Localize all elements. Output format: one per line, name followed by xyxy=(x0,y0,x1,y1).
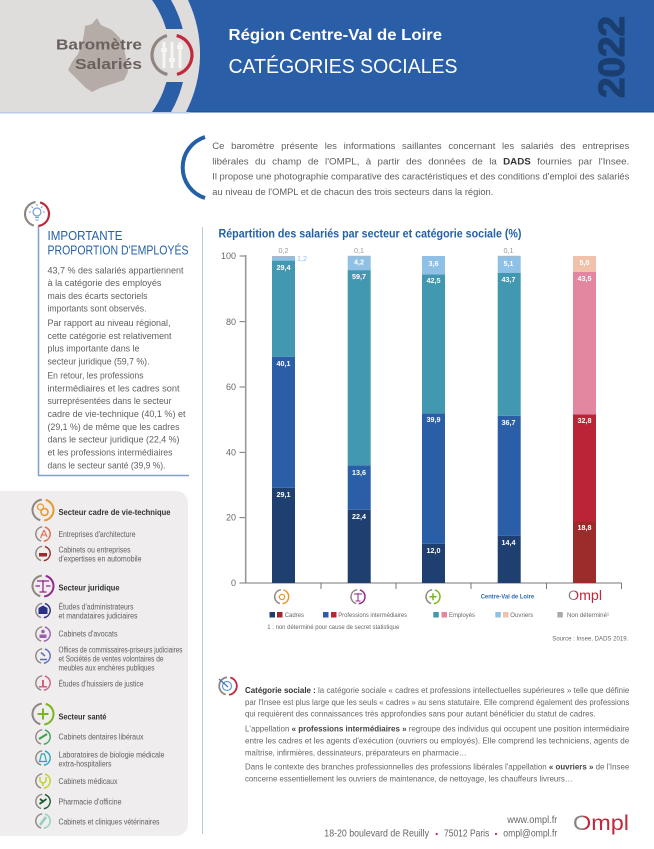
footer contact: ompl@ompl.fr xyxy=(503,828,558,839)
key finding body text: dans le secteur santé (39,9 %). xyxy=(48,459,166,470)
key finding body text xyxy=(48,264,186,470)
panel: sectors list xyxy=(0,491,188,836)
bar: cadre de vie-technique xyxy=(272,246,307,583)
bar: Centre-Val de Loire xyxy=(498,246,521,583)
key finding body text: mais des écarts sectoriels xyxy=(48,290,148,301)
bar: Centre-Val de Loire: 43,7 xyxy=(502,275,516,284)
sector: cadre de vie-technique: Cabinets ou entreprises xyxy=(58,546,130,555)
icon: laboratoire xyxy=(34,749,52,767)
sector: santé xyxy=(30,701,165,830)
key finding body text: intermédiaires et les cadres sont xyxy=(48,383,180,394)
icon: commissaires-priseurs xyxy=(34,647,52,665)
icon: cadre de vie-technique xyxy=(30,497,56,523)
y axis: 60 xyxy=(226,382,236,392)
definition: ouvriers xyxy=(245,762,629,783)
definitions block xyxy=(217,675,629,783)
definition: cadres: Catégorie sociale : la catégorie sociale « cadres et professions intellectuelles supérieures » telle que définie xyxy=(245,685,629,695)
chart legend xyxy=(270,612,610,619)
x category: Centre-Val de Loire: Centre-Val de Loire xyxy=(481,594,535,601)
bar: cadre de vie-technique: 1,2 xyxy=(297,254,307,263)
logo text: Baromètre Salariés: Baromètre xyxy=(56,38,142,54)
intro text xyxy=(212,140,630,197)
sector: juridique: et mandataires judiciaires xyxy=(58,611,138,620)
bar: juridique: 13,6 xyxy=(352,468,366,477)
intro text: Il propose une photographie comparative des caractéristiques et des conditions d'emploi des salariés xyxy=(212,170,630,181)
bar: santé: 39,9 xyxy=(426,415,440,424)
definition: professions intermédiaires: maîtrise, infirmières, dessinateurs, préparateurs en pharmacie… xyxy=(245,748,467,758)
bar: cadre de vie-technique: 40,1 xyxy=(276,359,290,368)
sector: juridique: Cabinets d'avocats xyxy=(58,630,118,639)
key finding body text: cadre de vie-technique (40,1 %) et xyxy=(48,408,186,419)
icon: pharmacie xyxy=(34,793,52,810)
bar: cadre de vie-technique: 0,2 xyxy=(278,246,288,255)
bar: juridique: 4,2 xyxy=(354,258,364,266)
sector: juridique: Secteur juridique xyxy=(58,584,120,593)
bar: santé xyxy=(422,256,445,583)
icon: balance xyxy=(30,573,56,599)
intro text: Ce baromètre présente les informations saillantes concernant les salariés des entreprises xyxy=(212,140,630,151)
chart title: Répartition des salariés par secteur et catégorie sociale (%) xyxy=(218,226,522,240)
footer contact: www.ompl.fr xyxy=(506,815,558,826)
key finding body text: 43,7 % des salariés appartiennent xyxy=(48,264,184,275)
definition: professions intermédiaires: L'appellation « professions intermédiaires » regroupe des individus qui occupent une position intermédiaire xyxy=(245,724,629,734)
header banner xyxy=(0,0,654,114)
chart legend: Employés xyxy=(449,612,476,619)
key finding body text: plus importante dans le xyxy=(48,343,140,354)
x category: santé icon xyxy=(424,588,442,605)
definition: professions intermédiaires xyxy=(245,724,629,758)
panel: key finding xyxy=(22,199,189,476)
icon: target xyxy=(217,675,239,697)
sector: santé: Laboratoires de biologie médicale xyxy=(58,750,165,759)
sector: juridique xyxy=(30,573,182,692)
x category: cadre de vie-technique icon xyxy=(273,588,290,605)
icon: plus xyxy=(30,701,56,727)
bar: juridique xyxy=(348,246,371,583)
sector: santé: Secteur santé xyxy=(58,712,107,721)
bar: Centre-Val de Loire: 5,1 xyxy=(504,259,514,268)
sector: santé: Pharmacie d'officine xyxy=(58,798,122,807)
bar: Centre-Val de Loire: 36,7 xyxy=(502,418,516,427)
sector: juridique: Études d'huissiers de justice xyxy=(58,680,144,689)
icon: huissiers xyxy=(34,674,52,692)
sector: juridique: meubles aux enchères publiques xyxy=(58,664,154,673)
bar: juridique: 59,7 xyxy=(352,272,366,281)
bracket arc xyxy=(183,137,205,198)
definition: cadres: qui requièrent des connaissances très approfondies sans pour autant bénéficier du statut de cadres. xyxy=(245,709,596,719)
bar: Centre-Val de Loire: 0,1 xyxy=(504,246,514,255)
icon: architecture xyxy=(34,525,52,543)
bar: juridique: 22,4 xyxy=(352,512,366,521)
key finding body text: Par rapport au niveau régional, xyxy=(48,317,170,328)
bar: santé: 42,5 xyxy=(426,276,440,285)
icon: médicaux xyxy=(34,772,52,790)
key finding body text: surreprésentées dans le secteur xyxy=(48,395,172,406)
chart legend: Cadres xyxy=(285,612,305,619)
heading: key finding: PROPORTION D'EMPLOYÉS xyxy=(48,242,189,258)
icon: light bulb xyxy=(22,199,52,229)
intro paragraph with bracket xyxy=(183,137,630,198)
stacked bar chart xyxy=(221,246,622,605)
bar: cadre de vie-technique: 29,1 xyxy=(276,490,290,499)
bar: santé: 12,0 xyxy=(426,546,440,555)
intro text: libérales du champ de l'OMPL, à partir des données de la DADS fournies par l'Insee. xyxy=(212,155,629,166)
sector: santé: Cabinets médicaux xyxy=(58,777,118,786)
footer contact: 75012 Paris xyxy=(444,828,489,839)
icon: automobile xyxy=(34,545,52,562)
bar: OMPL: 32,8 xyxy=(578,416,592,425)
y axis: 40 xyxy=(226,448,236,458)
header subtitle: Région Centre-Val de Loire xyxy=(228,27,442,44)
bar: juridique: 0,1 xyxy=(354,246,364,255)
y axis: 80 xyxy=(226,317,236,327)
heading: key finding: IMPORTANTE xyxy=(48,228,123,243)
x axis xyxy=(240,583,622,589)
sector: juridique: Études d'administrateurs xyxy=(58,602,134,611)
icon: avocats xyxy=(34,625,52,643)
definition: cadres xyxy=(245,685,629,719)
icon: administrateurs xyxy=(34,602,52,619)
chart legend: Professions intermédiaires xyxy=(338,612,408,619)
definition: ouvriers: concerne essentiellement les ouvriers de maintenance, de nettoyage, les chauffeurs livreurs… xyxy=(245,773,573,783)
definition: ouvriers: Dans le contexte des branches professionnelles des professions libérales l'appellation « ouvriers » de l'Insee xyxy=(245,762,629,772)
footer contact xyxy=(324,815,558,839)
region map silhouette xyxy=(68,18,128,92)
logo text: Baromètre Salariés: Salariés xyxy=(75,57,142,73)
y axis xyxy=(221,251,246,588)
key finding body text: à la catégorie des employés xyxy=(48,277,162,288)
x category: Ompl logo: Ompl xyxy=(568,588,602,603)
bar: Centre-Val de Loire: 14,4 xyxy=(502,538,516,547)
bar: cadre de vie-technique: 29,4 xyxy=(276,263,290,272)
header title: CATÉGORIES SOCIALES xyxy=(228,55,458,78)
y axis: 0 xyxy=(231,578,236,588)
definition: professions intermédiaires: entre les cadres et les agents d'exécution (ouvriers ou employés). Elle comprend les techniciens, agents de xyxy=(245,735,629,745)
sector: juridique: Offices de commissaires-priseurs judiciaires xyxy=(58,645,182,654)
icon: sliders barometer xyxy=(148,31,196,79)
bar: OMPL: 18,8 xyxy=(578,523,592,532)
bar: OMPL: 5,0 xyxy=(580,258,590,267)
logo text: Baromètre Salariés xyxy=(56,38,142,73)
heading: key finding xyxy=(48,228,189,258)
y axis: 100 xyxy=(221,251,236,261)
chart legend: Ouvriers xyxy=(510,612,534,619)
sector: cadre de vie-technique: Secteur cadre de vie-technique xyxy=(58,508,171,517)
key finding body text: secteur juridique (59,7 %). xyxy=(48,356,150,367)
bar: OMPL xyxy=(573,256,596,583)
sector: cadre de vie-technique: d'expertises en automobile xyxy=(58,554,142,563)
decorative blue arc band xyxy=(152,0,183,112)
bar: santé: 3,6 xyxy=(428,259,438,268)
key finding body text: importants sont observés. xyxy=(48,303,146,314)
key finding body text: (29,1 %) de même que les cadres xyxy=(48,421,180,432)
sector: cadre de vie-technique xyxy=(30,497,171,563)
key finding body text: dans le secteur juridique (22,4 %) xyxy=(48,434,180,445)
sector: santé: Cabinets dentaires libéraux xyxy=(58,733,144,742)
sector: santé: Cabinets et cliniques vétérinaires xyxy=(58,817,160,826)
key finding body text: cette catégorie est relativement xyxy=(48,330,172,341)
x category: juridique icon xyxy=(349,588,367,605)
bar: OMPL: 43,5 xyxy=(578,274,592,283)
key finding body text: et les professions intermédiaires xyxy=(48,447,173,458)
year: 2022 xyxy=(591,16,632,98)
source: Source : Insee, DADS 2019. xyxy=(552,636,628,643)
y axis: 20 xyxy=(226,512,236,522)
footer contact: 18-20 boulevard de Reuilly xyxy=(324,828,429,839)
chart legend: Non déterminé¹ xyxy=(567,612,610,619)
footnote: 1 : non déterminé pour cause de secret statistique xyxy=(267,624,400,631)
sector: juridique: et Sociétés de ventes volontaires de xyxy=(58,655,164,664)
sector: cadre de vie-technique: Entreprises d'architecture xyxy=(58,530,136,539)
icon: dentaire xyxy=(34,728,52,746)
sector: santé: extra-hospitaliers xyxy=(58,759,112,768)
icon: vétérinaires xyxy=(34,812,52,830)
intro text: au niveau de l'OMPL et de chacun des trois secteurs dans la région. xyxy=(212,186,493,197)
footer logo: Ompl xyxy=(573,812,629,835)
key finding body text: En retour, les professions xyxy=(48,370,144,381)
